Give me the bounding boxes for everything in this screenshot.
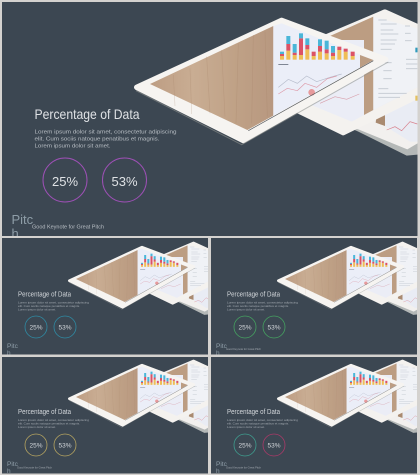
- body text: elit. Cum sociis natoque penatibus et magnis.: [34, 136, 160, 142]
- brand: [216, 344, 227, 354]
- heading: Percentage of Data: [34, 106, 140, 122]
- circle: 25%: [25, 316, 47, 338]
- body text: elit. Cum sociis natoque penatibus et magnis.: [227, 422, 289, 426]
- heading: Percentage of Data: [18, 409, 71, 416]
- body text: Lorem ipsum dolor sit amet, consectetur adipiscing: [18, 418, 89, 422]
- circle: 53%: [54, 316, 76, 338]
- circle: 53%: [263, 316, 285, 338]
- tagline: Good Keynote for Great Pitch: [226, 466, 262, 470]
- body text: [18, 302, 89, 311]
- brand: h: [7, 468, 11, 475]
- circle: 25%: [25, 434, 47, 456]
- slide: yellow: [2, 357, 213, 475]
- tagline: Good Keynote for Great Pitch: [17, 466, 53, 470]
- body text: [227, 419, 298, 428]
- tablet mockups: [278, 361, 420, 433]
- tagline: Good Keynote for Great Pitch: [226, 347, 262, 351]
- heading: Percentage of Data: [227, 292, 280, 298]
- brand: h: [216, 468, 220, 475]
- body text: Lorem ipsum dolor sit amet.: [227, 308, 265, 312]
- circle: 25%: [234, 434, 256, 456]
- tablet mockups: [278, 243, 420, 315]
- body text: Lorem ipsum dolor sit amet.: [34, 144, 111, 150]
- circle: 25%: 25%: [238, 442, 252, 450]
- brand: [8, 462, 18, 473]
- heading: Percentage of Data: [227, 409, 280, 416]
- body text: elit. Cum sociis natoque penatibus et magnis.: [18, 304, 80, 308]
- circle: 53%: 53%: [58, 324, 72, 332]
- brand: Pitc: [216, 343, 228, 350]
- circle: 53%: [263, 434, 285, 456]
- brand: Pitc: [7, 343, 19, 350]
- brand: Pitc: [7, 461, 19, 468]
- brand: [216, 462, 227, 473]
- slide: green: [211, 238, 420, 357]
- body text: Lorem ipsum dolor sit amet, consectetur adipiscing: [227, 300, 298, 304]
- brand: Pitc: [12, 212, 34, 227]
- body text: Lorem ipsum dolor sit amet, consectetur adipiscing: [227, 418, 298, 422]
- circle: 25%: [43, 158, 87, 202]
- brand: h: [7, 350, 11, 357]
- brand: Pitc: [216, 461, 228, 468]
- brand: [12, 214, 33, 236]
- tagline: Good Keynote for Great Pitch: [32, 224, 104, 230]
- body text: Lorem ipsum dolor sit amet, consectetur adipiscing: [18, 300, 89, 304]
- slide: blue: [2, 238, 213, 357]
- body text: Lorem ipsum dolor sit amet, consectetur adipiscing: [34, 130, 176, 136]
- heading: Percentage of Data: [18, 292, 71, 298]
- circle: 53%: [54, 434, 76, 456]
- body text: elit. Cum sociis natoque penatibus et magnis.: [18, 422, 80, 426]
- body text: [34, 130, 176, 150]
- body text: elit. Cum sociis natoque penatibus et magnis.: [227, 304, 289, 308]
- tablet mockups: [136, 12, 420, 156]
- body text: Lorem ipsum dolor sit amet.: [227, 425, 265, 429]
- circle: 53%: 53%: [267, 324, 281, 332]
- brand: h: [12, 226, 19, 241]
- circle: 25%: 25%: [238, 324, 252, 332]
- circle: 53%: [102, 158, 146, 202]
- circle: 25%: 25%: [52, 174, 78, 189]
- slide: teal and pink: [211, 357, 420, 475]
- body text: [227, 302, 298, 311]
- circle: 25%: 25%: [29, 442, 43, 450]
- slide: main purple: [2, 2, 420, 241]
- circle: 53%: 53%: [111, 174, 138, 189]
- tablet mockups: [69, 243, 213, 315]
- body text: Lorem ipsum dolor sit amet.: [18, 425, 56, 429]
- circle: 25%: 25%: [29, 324, 43, 332]
- brand: [8, 344, 18, 354]
- circle: 53%: 53%: [267, 442, 281, 450]
- body text: Lorem ipsum dolor sit amet.: [18, 308, 56, 312]
- tablet mockups: [69, 361, 213, 433]
- body text: [18, 419, 89, 428]
- circle: 53%: 53%: [58, 442, 72, 450]
- brand: h: [216, 350, 220, 357]
- circle: 25%: [234, 316, 256, 338]
